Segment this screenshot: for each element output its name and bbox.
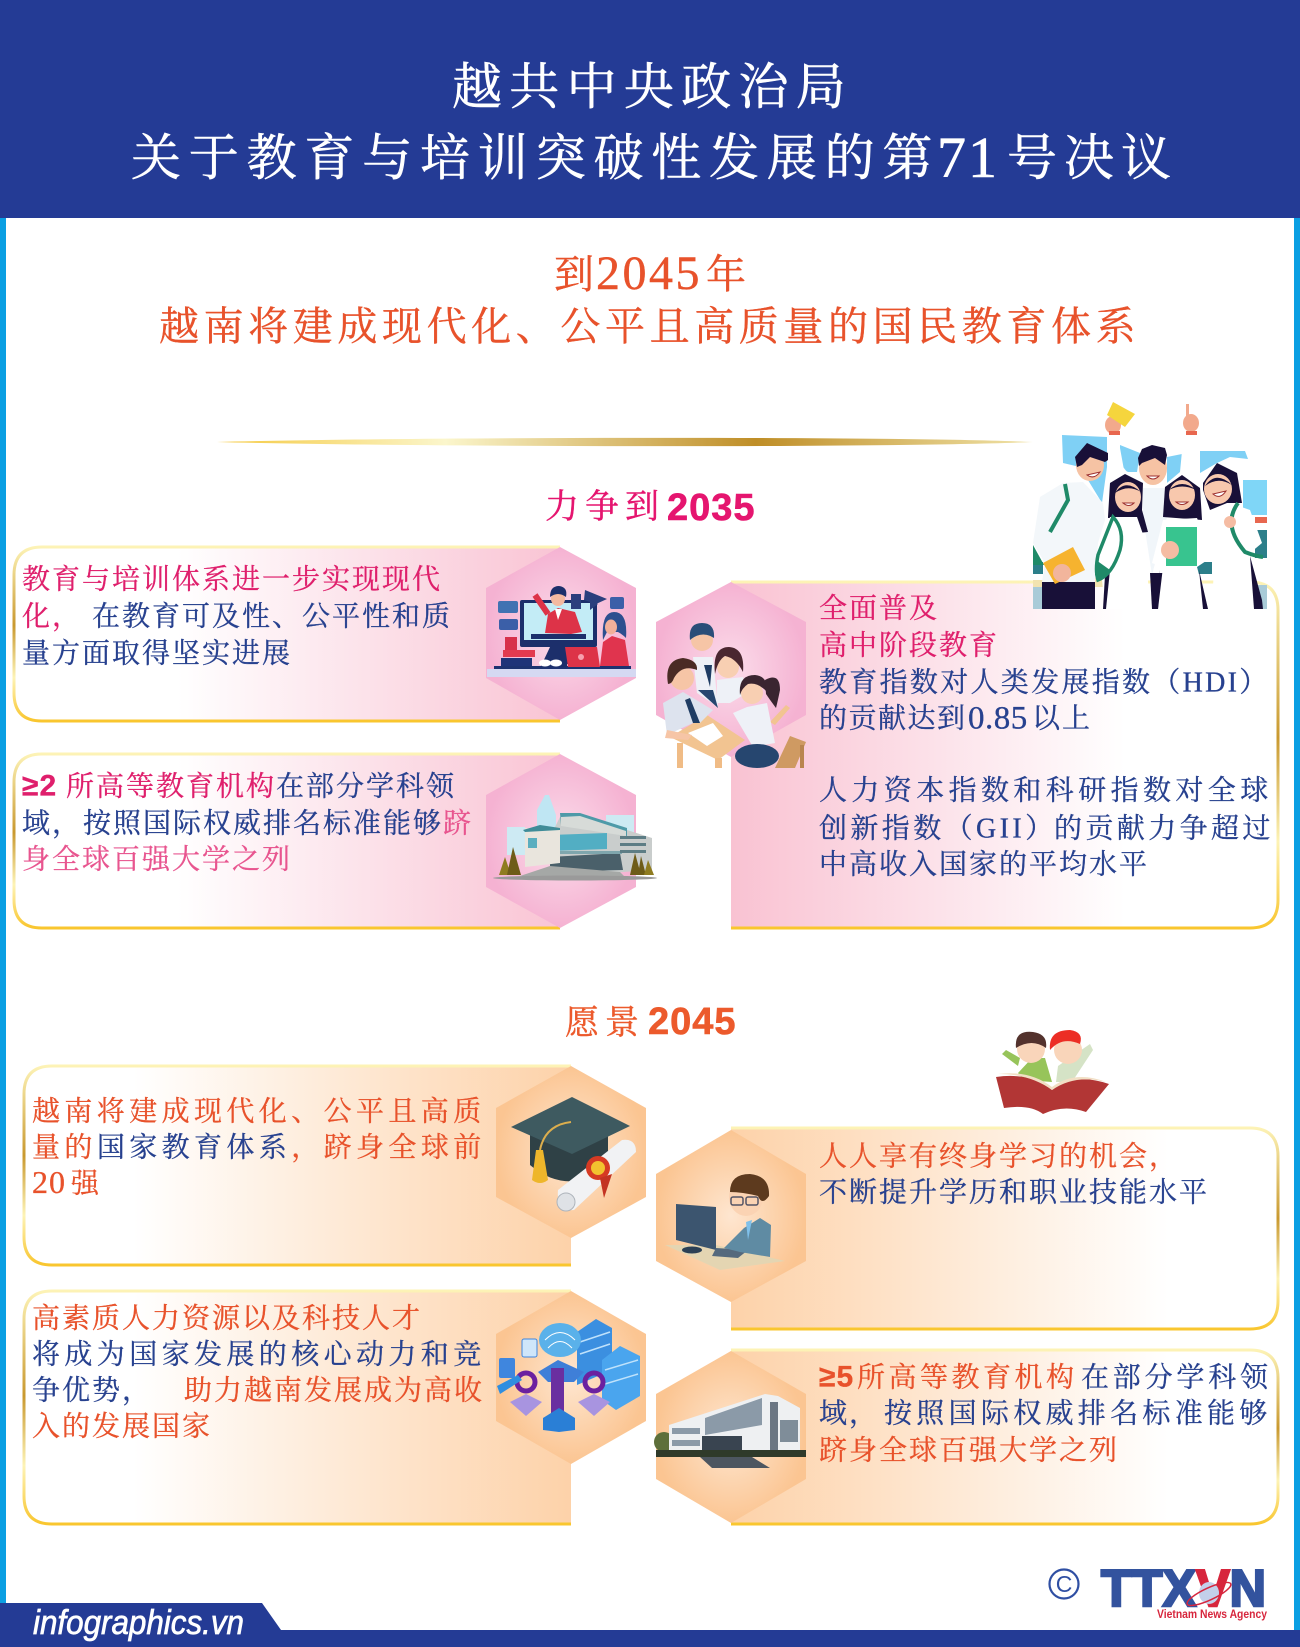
hexagon: [656, 1130, 806, 1302]
header band with title: 越共中央政治局: [452, 59, 853, 115]
text: 在教育可及性、公平性和质: [92, 600, 452, 632]
text: [819, 1140, 1209, 1208]
subtitle: [159, 247, 1140, 349]
footer band: [0, 1603, 1300, 1647]
text: 0.85: [968, 700, 1028, 736]
text: 创新指数（GII）: [819, 812, 1056, 844]
text: 教育指数对人类发展指数（HDI）: [819, 666, 1270, 698]
text: 按照国际权威排名标准能够跻: [83, 808, 473, 840]
text: ≥2: [22, 770, 57, 802]
icon: students studying: [663, 623, 806, 768]
hexagon: [486, 754, 636, 928]
gold divider: [217, 438, 1033, 446]
text: 全面普及: [819, 592, 939, 624]
header band with title: 71: [937, 125, 999, 190]
hexagon: [486, 547, 636, 720]
heading: 2035: [545, 487, 756, 529]
illustration: group of students: [1033, 402, 1267, 609]
text: 入的发展国家: [32, 1410, 212, 1442]
text: 域，: [819, 1398, 879, 1430]
text: 将成为国家发展的核心动力和竞: [32, 1338, 486, 1370]
panel: 2035 education system: [14, 547, 636, 721]
text: 的贡献达到: [819, 702, 967, 734]
hexagon: [496, 1066, 646, 1238]
panel: 2045 human resources: [24, 1291, 646, 1524]
text: 助力越南发展成为高收: [184, 1374, 484, 1406]
footer band: infographics.vn: [33, 1604, 244, 1642]
heading: vision 2045: [565, 1001, 737, 1043]
copyright and TTXVN logo: TTXVN: [1101, 1560, 1266, 1618]
text: 高中阶段教育: [819, 630, 999, 662]
text: [22, 564, 452, 670]
header band with title: [0, 0, 1300, 218]
text: [32, 1302, 486, 1442]
text: 量的国家教育体系，跻身全球前: [32, 1132, 486, 1164]
panel: 2045 lifelong learning: [656, 1128, 1278, 1329]
icon: university building: [654, 1394, 806, 1468]
text: [22, 770, 473, 876]
text: [819, 1360, 1272, 1466]
subtitle: 2045: [596, 247, 702, 300]
subtitle: 年: [706, 252, 746, 297]
header band with title: 号决议: [1007, 130, 1178, 186]
hexagon: [656, 582, 806, 757]
hexagon: [496, 1291, 646, 1464]
icon: graduation cap and diploma: [511, 1097, 636, 1211]
heading: 2035: 2035: [667, 487, 756, 529]
heading: 2035: 力争到: [545, 488, 665, 526]
text: [32, 1096, 486, 1200]
text: 所高等教育机构: [857, 1362, 1078, 1394]
text: 所高等教育机构: [66, 770, 276, 802]
icon: campus building: [493, 795, 657, 880]
heading: vision 2045: 愿景: [565, 1005, 645, 1042]
text: 身全球百强大学之列: [22, 844, 292, 876]
text: 强: [71, 1168, 101, 1200]
text: 人人享有终身学习的机会，: [819, 1140, 1179, 1172]
text: 以上: [1032, 702, 1092, 734]
text: 争优势，: [32, 1374, 152, 1406]
copyright and TTXVN logo: C: [1056, 1571, 1072, 1597]
text: 的贡献力争超过: [1054, 812, 1274, 844]
panel: 2045 national education system: [24, 1066, 646, 1265]
icon: technology and AI: [497, 1319, 640, 1432]
text: 在部分学科领: [276, 770, 456, 802]
subtitle: 到: [554, 252, 594, 297]
illustration: children on a book: [996, 1030, 1109, 1114]
subtitle: 越南将建成现代化、公平且高质量的国民教育体系: [159, 304, 1140, 349]
text: 不断提升学历和职业技能水平: [819, 1176, 1209, 1208]
text: 20: [32, 1164, 66, 1200]
icon: online teacher: [487, 586, 636, 677]
copyright and TTXVN logo: Vietnam News Agency: [1157, 1607, 1267, 1621]
text: 跻身全球百强大学之列: [819, 1434, 1119, 1466]
text: 人力资本指数和科研指数对全球: [819, 774, 1273, 806]
panel: 2035 top universities: [14, 754, 657, 928]
hexagon: [656, 1351, 806, 1523]
text: ≥5: [819, 1360, 854, 1394]
text: 量方面取得坚实进展: [22, 638, 292, 670]
panel: 2045 top universities: [654, 1350, 1278, 1524]
heading: vision 2045: 2045: [648, 1001, 737, 1043]
text: [819, 592, 1274, 880]
text: 化，: [22, 600, 82, 632]
header band with title: 关于教育与培训突破性发展的第: [131, 130, 940, 186]
text: 教育与培训体系进一步实现现代: [22, 564, 442, 596]
text: 中高收入国家的平均水平: [819, 848, 1149, 880]
text: 越南将建成现代化、公平且高质: [32, 1096, 486, 1128]
text: 域，: [22, 808, 82, 840]
panel: 2035 high-school education and indices: [656, 582, 1278, 928]
text: 高素质人力资源以及科技人才: [32, 1302, 422, 1334]
text: 按照国际权威排名标准能够: [884, 1398, 1272, 1430]
text: 在部分学科领: [1081, 1362, 1272, 1394]
icon: man at computer: [665, 1174, 785, 1270]
